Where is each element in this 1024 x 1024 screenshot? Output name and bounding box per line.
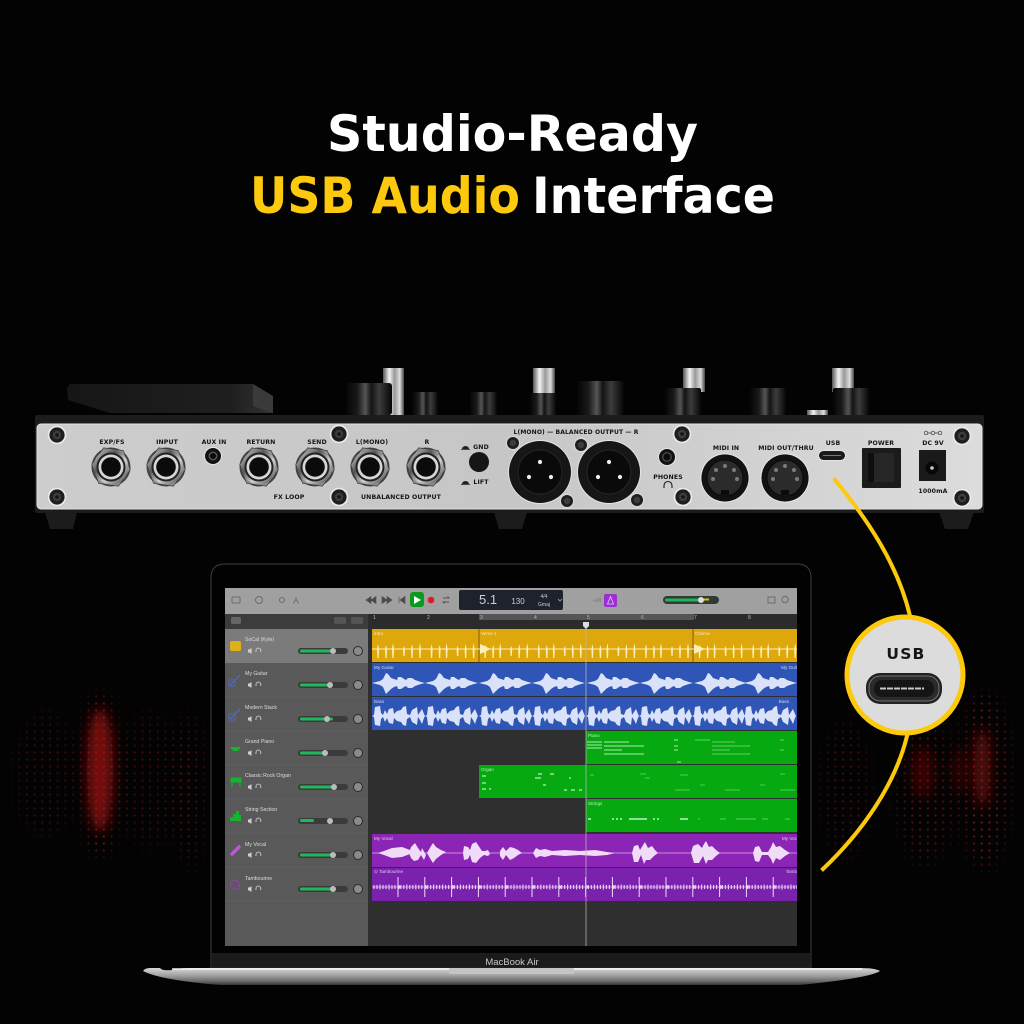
panel labels: 1000mA (918, 488, 948, 495)
USB-C port enlarged (866, 673, 942, 704)
panel labels: SEND (307, 439, 327, 446)
ruler: 2 (427, 615, 430, 621)
yellow drum region (372, 629, 801, 662)
purple tambourine region: ⊙ Tambourine (374, 869, 403, 874)
LCD display: 4/4 (541, 594, 548, 600)
blue guitar region: My Guit (781, 665, 798, 670)
DC power jack (919, 431, 946, 481)
green strings region (586, 799, 797, 832)
panel labels: POWER (868, 440, 894, 447)
laptop base (143, 968, 880, 985)
USB-C port (818, 450, 846, 461)
green strings region: Strings (588, 801, 603, 806)
panel labels: RETURN (247, 439, 275, 446)
device: rear panel (35, 415, 984, 529)
yellow drum region: Verse 1 (481, 631, 497, 636)
panel labels: MIDI IN (713, 445, 739, 452)
purple vocal region: My Vocal (374, 836, 393, 841)
track: SoCal (Kyle) (230, 637, 362, 656)
yellow connector cable (823, 480, 910, 869)
USB callout circle (847, 617, 963, 733)
ruler: 3 (480, 615, 483, 621)
ruler: 7 (694, 615, 697, 621)
green organ region: Organ (481, 767, 494, 772)
panel labels: L(MONO) — BALANCED OUTPUT — R (514, 429, 639, 436)
device: top controls (67, 368, 869, 415)
track: Modern Stack: Modern Stack (245, 705, 277, 711)
purple tambourine region (372, 868, 804, 901)
track: Modern Stack (228, 705, 362, 724)
yellow drum region: Chorus (695, 631, 711, 636)
panel labels: L(MONO) (356, 439, 388, 446)
track: Tambourine: Tambourine (245, 876, 272, 882)
panel labels: MIDI OUT/THRU (758, 445, 814, 452)
ruler: 1 (373, 615, 376, 621)
screen: GarageBand (225, 588, 804, 946)
blue bass region: Bass (779, 699, 790, 704)
toolbar left icons (232, 596, 298, 604)
power switch (862, 448, 901, 488)
LCD display: Gmaj (538, 602, 550, 608)
panel labels: INPUT (156, 439, 179, 446)
track: My Guitar (228, 671, 362, 690)
green organ region (479, 765, 797, 798)
purple vocal region (372, 834, 798, 867)
ruler: 4 (534, 615, 537, 621)
track: My Vocal (232, 842, 362, 860)
playhead (583, 622, 589, 946)
master volume (663, 596, 719, 604)
panel labels: EXP/FS (99, 439, 125, 446)
panel labels: UNBALANCED OUTPUT (361, 494, 442, 501)
XLR outputs (506, 436, 644, 508)
toolbar right icons (768, 596, 788, 603)
laptop lid (211, 564, 811, 968)
ruler (369, 614, 797, 629)
ruler: 6 (641, 615, 644, 621)
transport controls (366, 592, 449, 607)
green piano region (586, 731, 797, 764)
blue guitar region: My Guitar (374, 665, 394, 670)
blue bass region: Bass (374, 699, 385, 704)
title: USB Audio (250, 167, 520, 225)
track: String Section: String Section (245, 807, 277, 813)
screen background (225, 588, 797, 946)
panel labels: DC 9V (922, 440, 944, 447)
panel labels: PHONES (653, 474, 683, 481)
LCD display: 5.1 (479, 592, 497, 607)
ground lift switch (461, 446, 489, 484)
lower bezel strip (212, 953, 810, 967)
knobs and posts (346, 368, 869, 415)
aux in jack (204, 447, 222, 465)
toolbar (225, 588, 797, 614)
track: Grand Piano (230, 739, 362, 758)
blue guitar region (372, 663, 798, 696)
chassis (35, 415, 984, 513)
ruler: 5 (587, 615, 590, 621)
title: Studio-Ready (327, 105, 698, 163)
panel labels: FX LOOP (274, 494, 305, 501)
silver face plate (37, 424, 982, 509)
MacBook Air label: MacBook Air (485, 957, 539, 968)
laptop (143, 564, 880, 985)
rubber feet (45, 512, 974, 529)
tuner and metronome: +68 (593, 598, 601, 604)
title: Interface (532, 167, 775, 225)
LCD display: 130 (511, 597, 525, 606)
blue bass region (372, 697, 797, 730)
expression pedal (67, 384, 273, 413)
MIDI ports (700, 453, 810, 503)
panel labels: AUX IN (202, 439, 226, 446)
purple vocal region: My Voc (782, 836, 798, 841)
phones jack (658, 448, 676, 488)
yellow drum region: Intro (374, 631, 384, 636)
purple tambourine region: Tamb (786, 869, 797, 874)
track: String Section (230, 807, 362, 826)
tuner and metronome (593, 594, 617, 607)
panel screws (48, 425, 971, 507)
track list panel (225, 614, 368, 946)
red dot equalizer glow (10, 682, 1021, 878)
track: Classic Rock Organ: Classic Rock Organ (245, 773, 291, 779)
track: Tambourine (230, 876, 362, 894)
track: Grand Piano: Grand Piano (245, 739, 274, 745)
panel labels (99, 429, 948, 501)
track: My Vocal: My Vocal (245, 842, 266, 848)
panel labels: GND (473, 444, 489, 451)
quarter-inch jacks (89, 446, 448, 488)
USB label: USB (886, 645, 926, 663)
LCD display (459, 590, 563, 610)
panel labels: USB (826, 440, 840, 447)
ruler: 8 (748, 615, 751, 621)
panel labels: R (425, 439, 430, 446)
track: SoCal (Kyle): SoCal (Kyle) (245, 637, 274, 643)
green piano region: Piano (588, 733, 600, 738)
panel labels: LIFT (473, 479, 489, 486)
track: Classic Rock Organ (231, 773, 362, 792)
track: My Guitar: My Guitar (245, 671, 268, 677)
title (250, 105, 775, 225)
